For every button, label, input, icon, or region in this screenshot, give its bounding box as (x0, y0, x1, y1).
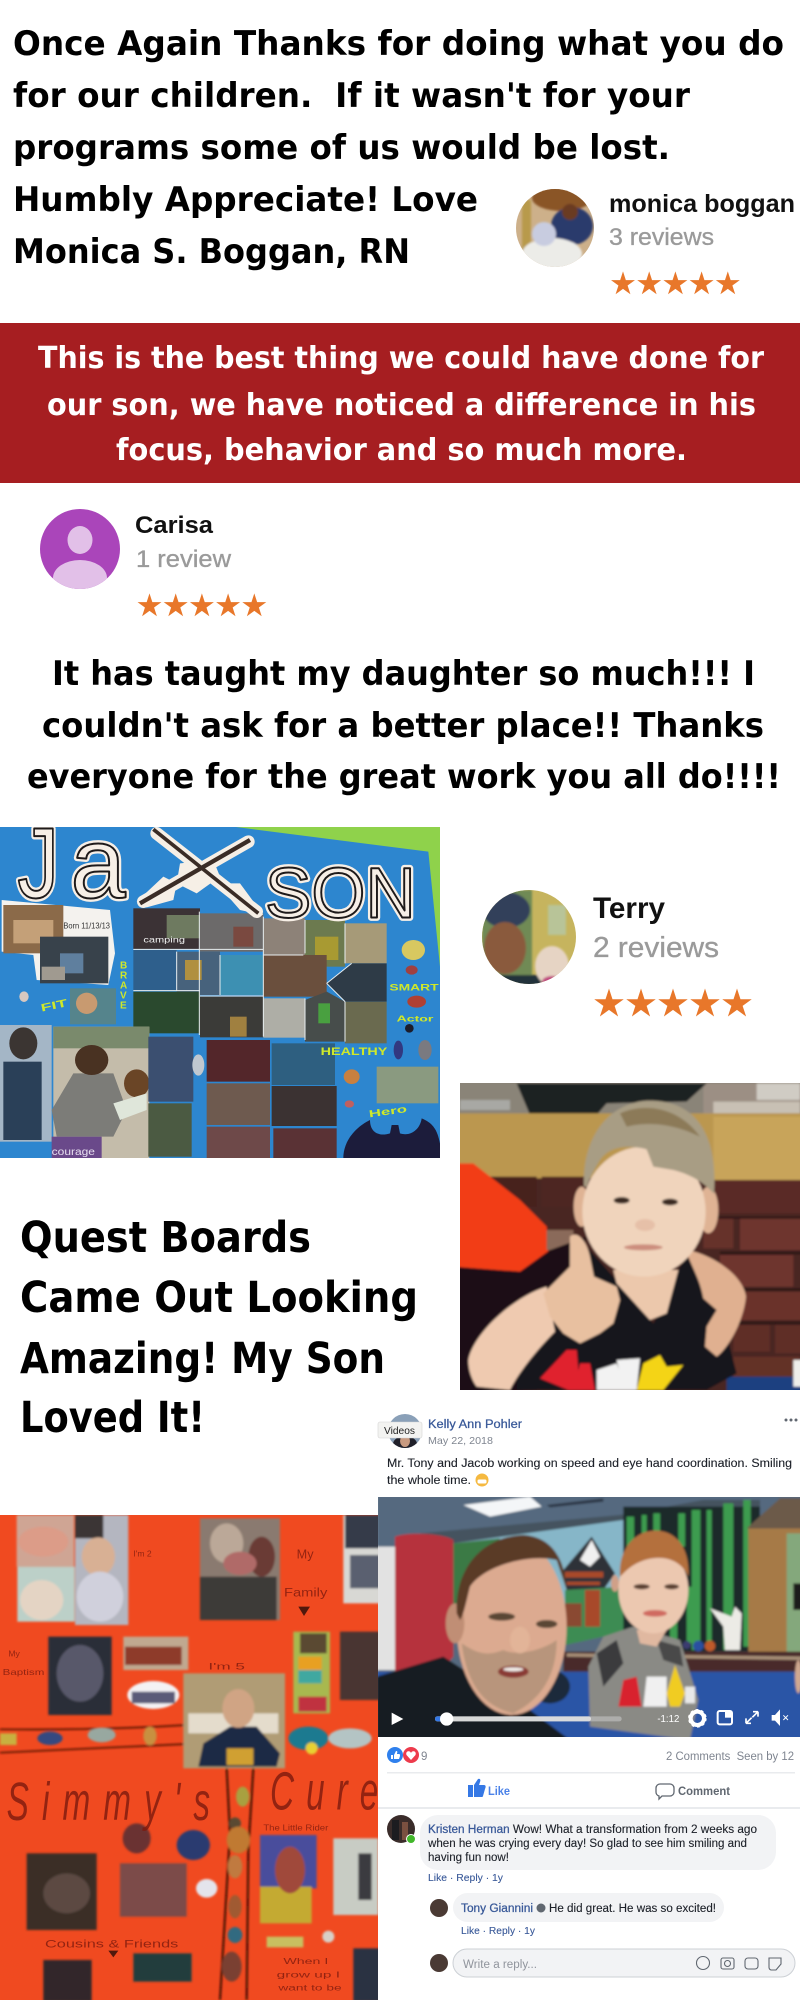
top collage (133, 908, 200, 949)
board lettering: a (71, 807, 126, 919)
input icons (696, 1956, 781, 1970)
shirt logo (540, 1350, 580, 1390)
hair (584, 1101, 714, 1194)
reply: Tony Giannini: Tony Giannini (461, 1903, 533, 1915)
reply bubble (453, 1893, 724, 1922)
commenter avatar (387, 1815, 415, 1843)
photo: Jaxson quest board: HEALTHY (321, 1046, 387, 1058)
shirt (517, 1247, 737, 1390)
photo: orange quest board: My (8, 1649, 21, 1659)
avatar: monica (516, 185, 594, 270)
testimonial: Monica quote: for our children. If it wasn't for your (13, 76, 690, 116)
stickers (402, 940, 425, 960)
swords (143, 833, 257, 912)
comment counts: 2 Comments Seen by 12 (666, 1751, 794, 1763)
left arm and thumb (468, 1287, 555, 1390)
testimonial: Monica quote: Humbly Appreciate! Love (13, 180, 478, 220)
strip lines (0, 1725, 187, 1729)
tooltip: Videos: Videos (384, 1425, 415, 1437)
photo: orange quest board: Family (284, 1586, 327, 1600)
photo: Jaxson quest board: B (120, 960, 127, 971)
post date: May 22, 2018 (428, 1435, 493, 1447)
red sleeve (453, 1163, 548, 1272)
reply: Tony Giannini: He did great. He was so excited! (549, 1903, 716, 1915)
eyes (614, 1197, 630, 1204)
comment: Kristen Herman: when he was crying every day! So glad to see him smiling and (427, 1838, 747, 1850)
photo: Jaxson quest board: R (120, 970, 127, 981)
testimonial: quest boards (20, 1213, 418, 1443)
wood ledge (453, 1113, 800, 1178)
photo: orange quest board: Cousins & Friends (45, 1938, 178, 1950)
moderator badge (536, 1904, 546, 1912)
review card: Terry (482, 890, 752, 1017)
boy photo (183, 1673, 285, 1768)
player controls (392, 1713, 403, 1725)
video frame (377, 1495, 800, 1740)
photo: orange quest board: Baptism (3, 1667, 44, 1677)
testimonial: Monica quote (13, 24, 784, 272)
mouth (624, 1244, 663, 1250)
small photo (70, 988, 116, 1024)
reaction icons (387, 1747, 419, 1763)
reply input: Write a reply... (463, 1959, 537, 1971)
review count: 3 reviews (609, 224, 714, 251)
mat (377, 1672, 800, 1740)
review card: Carisa (40, 509, 266, 616)
board lettering: SON (265, 853, 416, 933)
photo: Jaxson quest board: V (120, 990, 127, 1001)
photo: orange quest board: Cure (270, 1763, 378, 1821)
photo: orange quest board: My (297, 1547, 314, 1561)
board lettering: a (71, 807, 126, 919)
testimonial: Monica quote: Once Again Thanks for doing what you do (13, 24, 784, 64)
reviewer name: Carisa (135, 512, 214, 539)
photo: Jaxson quest board: E (120, 1000, 127, 1011)
flower stickers (123, 1823, 151, 1853)
testimonial: Monica quote: Monica S. Boggan, RN (13, 232, 410, 272)
bottom middle (207, 1040, 270, 1082)
photo: Jaxson quest board: Hero (368, 1104, 408, 1120)
wooden hut (748, 1528, 800, 1653)
testimonial: Monica quote: programs some of us would be lost. (13, 128, 670, 168)
right arm (688, 1250, 746, 1357)
mountain (563, 1537, 615, 1590)
testimonial: daughter quote (27, 654, 781, 797)
heavy bag (395, 1534, 453, 1677)
five stars (611, 271, 740, 294)
review count: 2 reviews (593, 932, 719, 964)
banner: red testimonial (0, 323, 800, 483)
like button: Like (488, 1784, 510, 1798)
board lettering: J (17, 807, 59, 919)
banner: red testimonial: our son, we have noticed a difference in his (47, 388, 756, 423)
reply avatar (430, 1899, 448, 1917)
board lettering: J (17, 807, 59, 919)
avatar: Carisa placeholder (40, 509, 120, 596)
photo: orange quest board: want to be (277, 1983, 342, 1993)
photo: Jaxson quest board: A (120, 980, 127, 991)
bamboo backdrop (623, 1507, 760, 1652)
avatar: Terry (482, 890, 576, 988)
sticker strip right (288, 1727, 328, 1750)
testimonial: quest boards: Came Out Looking (20, 1273, 418, 1323)
post text: Mr. Tony and Jacob working on speed and eye hand coordination. Smiling (387, 1458, 792, 1470)
handwriting: Simmy's (7, 1773, 210, 1832)
post avatar (388, 1414, 422, 1452)
reply actions: Like · Reply · 1y (461, 1925, 536, 1937)
comment: Kristen Herman (387, 1815, 776, 1884)
comment actions: Like · Reply · 1y (428, 1872, 504, 1884)
comment button (656, 1784, 730, 1799)
Born panel (2, 900, 115, 985)
photo: Jaxson quest board: SMART (389, 983, 439, 993)
testimonial: daughter quote: couldn't ask for a better place!! Thanks (42, 706, 764, 746)
green hill (565, 1587, 633, 1645)
comment: Kristen Herman: Kristen Herman Wow! What a transformation from 2 weeks ago (428, 1824, 757, 1836)
post reactions and actions (378, 1747, 800, 1809)
reviewer name: monica boggan (609, 190, 795, 218)
photo: boy thumbs up (453, 1080, 800, 1397)
tooltip: Videos (378, 1422, 422, 1438)
comment: Kristen Herman: having fun now! (428, 1852, 509, 1864)
video frame: -1:12 (657, 1714, 680, 1725)
reply input (430, 1949, 795, 1977)
menu dots (784, 1418, 798, 1422)
left wall (377, 1547, 397, 1670)
bricks (713, 1180, 800, 1213)
stage (563, 1652, 800, 1673)
dark lower left (453, 1237, 587, 1393)
photo: orange quest board: When I (283, 1956, 328, 1966)
photo: Jaxson quest board: Born 11/13/13 (63, 921, 111, 930)
torii (565, 1572, 603, 1578)
shirt logo (618, 1677, 642, 1707)
review card: monica boggan (516, 185, 795, 294)
banner: red testimonial: This is the best thing we could have done for (38, 341, 764, 376)
photo: Jaxson quest board: courage (52, 1147, 96, 1158)
hero (377, 1067, 438, 1103)
lower photos (27, 1853, 97, 1930)
testimonial: quest boards: Amazing! My Son (20, 1334, 385, 1384)
photo: orange quest board: The Little Rider (263, 1824, 329, 1833)
photo: Jaxson quest board: camping (143, 935, 185, 945)
neck and face (613, 1270, 678, 1320)
board lettering: SON (265, 853, 416, 933)
comment button: Comment (678, 1784, 730, 1798)
five stars (138, 593, 266, 616)
facebook post (378, 1414, 798, 1486)
rocks and bag (460, 1083, 800, 1115)
photo: orange quest board: I'm 5 (208, 1661, 245, 1671)
photo: Jaxson quest board (0, 807, 443, 1160)
photo: Jaxson quest board: FIT (40, 997, 69, 1015)
comment bubble (420, 1815, 776, 1870)
bottom left (0, 1025, 52, 1142)
karate student (710, 1607, 742, 1650)
testimonial: daughter quote: It has taught my daughter so much!!! I (52, 654, 755, 694)
mural sky (453, 1520, 623, 1633)
photo: orange quest board: I'm 2 (133, 1549, 152, 1559)
reviewer name: Terry (593, 892, 665, 925)
man head (457, 1538, 567, 1715)
photo: orange quest board (0, 1515, 380, 2000)
board lettering (16, 827, 414, 922)
testimonial: quest boards: Loved It! (20, 1393, 205, 1443)
boy (588, 1627, 698, 1740)
facebook post: the whole time. (387, 1475, 471, 1487)
reaction count: 9 (421, 1751, 427, 1763)
man shirt (377, 1657, 570, 1740)
like button (468, 1779, 510, 1798)
balls (693, 1641, 704, 1651)
reply: Tony Giannini (430, 1893, 724, 1937)
banner: red testimonial: focus, behavior and so much more. (116, 433, 687, 468)
testimonial: quest boards: Quest Boards (20, 1213, 311, 1263)
vertical lines (220, 1768, 230, 2000)
floor (727, 1377, 800, 1393)
emoji (476, 1474, 488, 1486)
photo: orange quest board: grow up I (277, 1969, 340, 1979)
photo: Jaxson quest board: Actor (397, 1014, 434, 1024)
five stars (594, 988, 752, 1017)
author name: Kelly Ann Pohler (428, 1419, 522, 1431)
review count: 1 review (136, 546, 232, 573)
